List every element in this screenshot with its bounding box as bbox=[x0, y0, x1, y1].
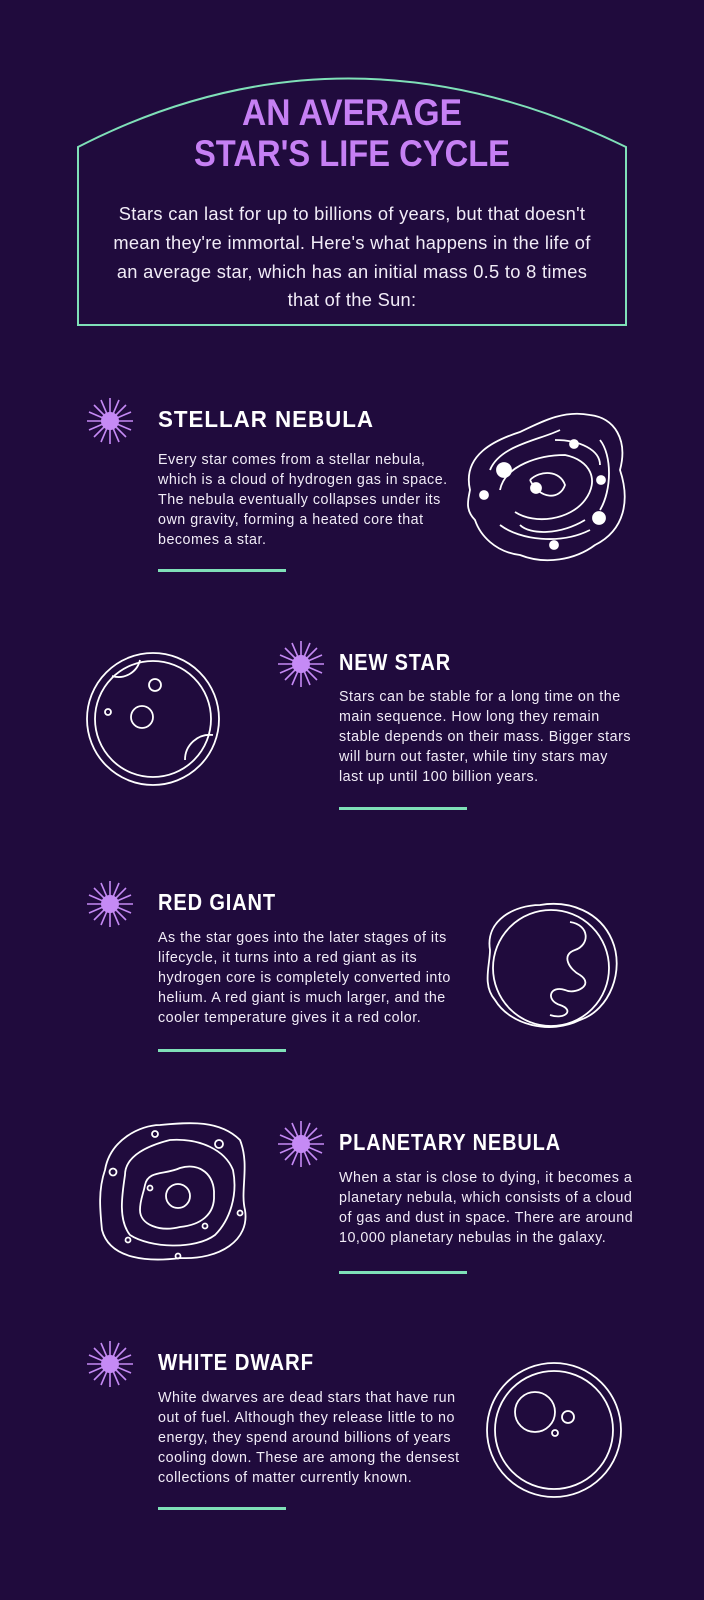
body text: When a star is close to dying, it becomes a bbox=[339, 1170, 632, 1186]
icon: starburst bbox=[278, 1121, 324, 1167]
body text: Every star comes from a stellar nebula, bbox=[158, 452, 425, 468]
body text: White dwarves are dead stars that have run bbox=[158, 1390, 456, 1406]
header panel bbox=[78, 78, 626, 325]
body text: cooler temperature gives it a red color. bbox=[158, 1010, 421, 1026]
body text: hydrogen core is completely converted into bbox=[158, 970, 451, 986]
heading: STELLAR NEBULA bbox=[158, 406, 374, 432]
body text bbox=[158, 1390, 460, 1486]
body text: collections of matter currently known. bbox=[158, 1470, 412, 1486]
illustration: white dwarf bbox=[487, 1363, 621, 1497]
body text: lifecycle, it turns into a red giant as its bbox=[158, 950, 417, 966]
underline bbox=[158, 1507, 286, 1510]
section: red giant bbox=[87, 881, 617, 1052]
body text: becomes a star. bbox=[158, 532, 266, 548]
body text: energy, they spend around billions of years bbox=[158, 1430, 451, 1446]
body text bbox=[338, 689, 631, 785]
body text bbox=[339, 1170, 633, 1246]
body text: As the star goes into the later stages of its bbox=[158, 930, 447, 946]
icon: starburst bbox=[87, 1341, 133, 1387]
underline bbox=[158, 569, 286, 572]
body text bbox=[158, 930, 451, 1026]
underline bbox=[158, 1049, 286, 1052]
illustration: planetary nebula bbox=[100, 1123, 246, 1260]
body text: will burn out faster, while tiny stars may bbox=[338, 749, 608, 765]
section: new star bbox=[87, 641, 631, 810]
intro text: that of the Sun: bbox=[288, 289, 416, 310]
illustration: nebula bbox=[468, 414, 625, 560]
body text: which is a cloud of hydrogen gas in space. bbox=[157, 472, 448, 488]
intro text: Stars can last for up to billions of years, but that doesn't bbox=[119, 203, 585, 224]
body text: Stars can be stable for a long time on the bbox=[339, 689, 621, 705]
icon: starburst bbox=[87, 881, 133, 927]
intro text: an average star, which has an initial mass 0.5 to 8 times bbox=[117, 261, 587, 282]
body text: stable depends on their mass. Bigger stars bbox=[339, 729, 631, 745]
title: AN AVERAGE bbox=[242, 92, 462, 133]
body text: The nebula eventually collapses under its bbox=[158, 492, 441, 508]
heading: RED GIANT bbox=[158, 889, 276, 915]
illustration: red giant bbox=[488, 904, 617, 1027]
intro text: mean they're immortal. Here's what happens in the life of bbox=[113, 232, 591, 253]
body text: main sequence. How long they remain bbox=[339, 709, 600, 725]
title bbox=[194, 92, 510, 174]
section: white dwarf bbox=[87, 1341, 621, 1510]
body text: out of fuel. Although they release little to no bbox=[158, 1410, 455, 1426]
body text: of gas and dust in space. There are around bbox=[339, 1210, 633, 1226]
underline bbox=[339, 807, 467, 810]
section: planetary nebula bbox=[100, 1121, 633, 1274]
body text: cooling down. These are among the densest bbox=[158, 1450, 460, 1466]
icon: starburst bbox=[87, 398, 133, 444]
icon: starburst bbox=[278, 641, 324, 687]
body text bbox=[157, 452, 448, 548]
heading: PLANETARY NEBULA bbox=[339, 1129, 561, 1155]
intro text bbox=[113, 203, 591, 310]
underline bbox=[339, 1271, 467, 1274]
body text: planetary nebula, which consists of a cloud bbox=[339, 1190, 632, 1206]
heading: WHITE DWARF bbox=[158, 1349, 314, 1375]
section: stellar nebula bbox=[87, 398, 625, 572]
body text: own gravity, forming a heated core that bbox=[158, 512, 424, 528]
body text: 10,000 planetary nebulas in the galaxy. bbox=[339, 1230, 606, 1246]
heading: NEW STAR bbox=[339, 649, 451, 675]
illustration: new star bbox=[87, 653, 219, 785]
body text: helium. A red giant is much larger, and the bbox=[158, 990, 446, 1006]
title: STAR'S LIFE CYCLE bbox=[194, 133, 510, 174]
body text: last up until 100 billion years. bbox=[339, 769, 539, 785]
